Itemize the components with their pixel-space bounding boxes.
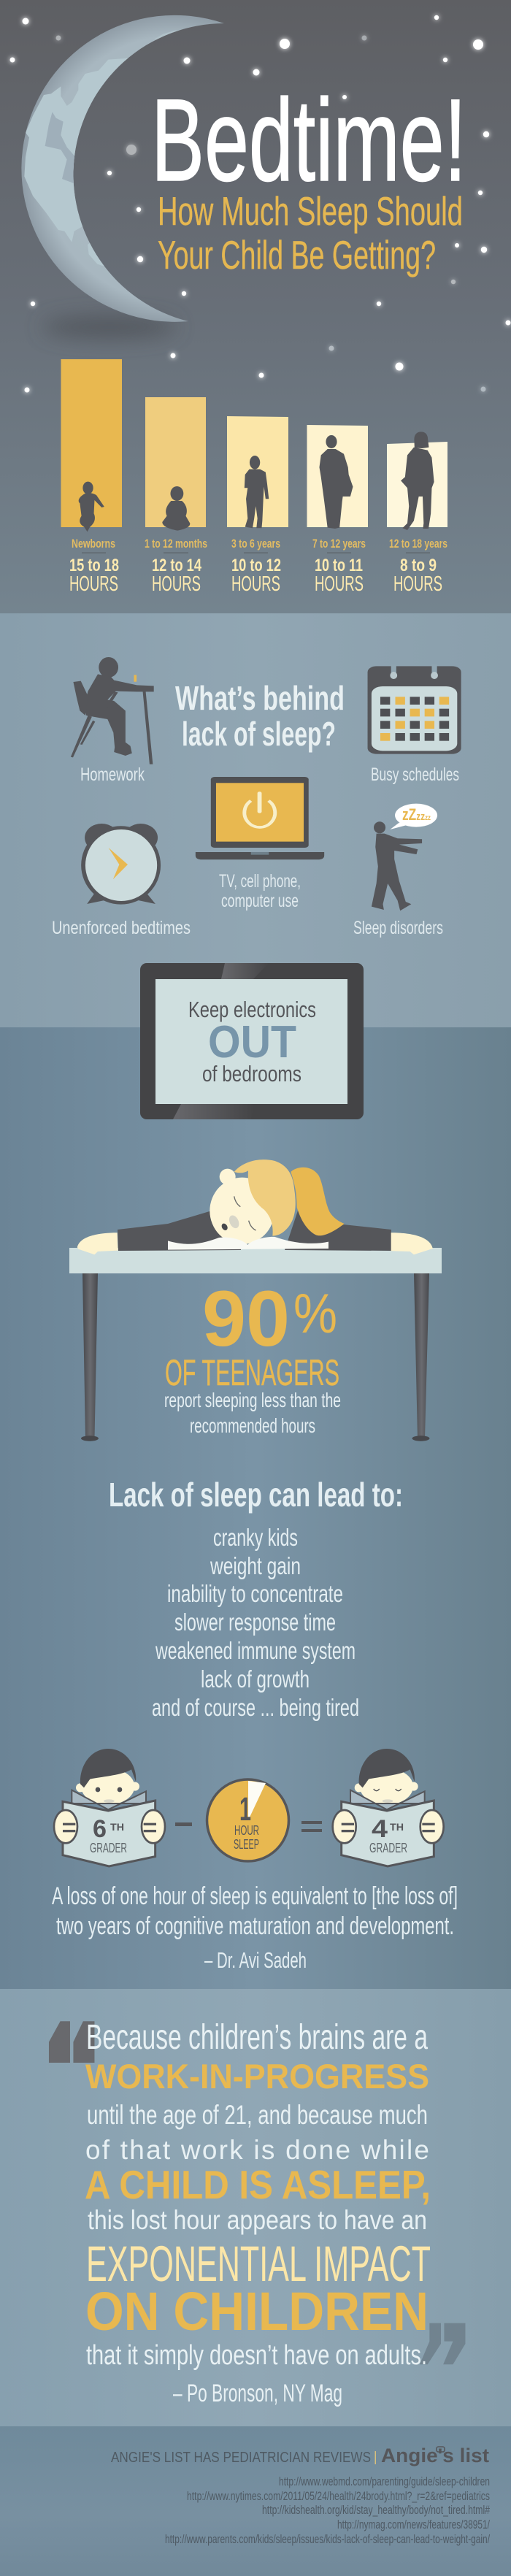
attribution: Dr. Avi Sadeh: – Dr. Avi Sadeh (204, 1947, 307, 1973)
bar: 12 to 18 years (387, 442, 447, 527)
list: effects of lack of sleep: lack of growth (201, 1665, 310, 1693)
moon shadow (42, 316, 177, 338)
icon: sleepwalker with speech bubble (372, 804, 437, 911)
hands (77, 1233, 433, 1254)
list: effects of lack of sleep: slower response time (174, 1609, 336, 1636)
text: report sleeping less: report sleeping less than the (164, 1389, 341, 1411)
footer: sponsor line: Angie's list (381, 2445, 489, 2466)
subtitle (158, 188, 463, 277)
quote: Po Bronson: this lost hour appears to have an (88, 2205, 427, 2235)
sleeping girl head (168, 1159, 345, 1250)
stars (10, 15, 511, 393)
heading: what's behind lack of sleep: lack of sleep? (182, 715, 336, 753)
callout: tablet keep electronics out of bedrooms (140, 963, 364, 1119)
panel: quote background (0, 1989, 511, 2426)
icon: alarm clock (81, 824, 161, 905)
label: tv, cell phone, computer use: computer use (221, 891, 299, 911)
list: effects of lack of sleep: inability to concentrate (167, 1580, 343, 1607)
label: tv, cell phone, computer use (219, 871, 301, 911)
age labels (72, 537, 447, 551)
hours labels: HOURS (315, 572, 364, 596)
icon: calendar (368, 664, 461, 754)
label: busy schedules: Busy schedules (371, 764, 459, 785)
heading: what's behind lack of sleep: What’s behind (175, 679, 345, 717)
panel: night sky background (0, 0, 511, 613)
quote: Po Bronson: WORK-IN-PROGRESS (85, 2057, 429, 2096)
icon: minus sign (175, 1822, 192, 1826)
panel: effects background (0, 1027, 511, 1989)
icon: 6th grader reading (54, 1749, 165, 1866)
table top (69, 1248, 442, 1273)
icon: 6th grader reading: GRADER (90, 1841, 127, 1855)
hours ranges: 10 to 12 (231, 556, 281, 575)
hours labels (69, 572, 442, 596)
hours labels: HOURS (69, 572, 118, 596)
sleeve left (118, 1211, 241, 1251)
icon: clock with one hour of sleep: 1 (239, 1790, 251, 1828)
age labels: 3 to 6 years (231, 537, 280, 551)
icon: clock with one hour of sleep (207, 1779, 289, 1861)
panel: causes background (0, 613, 511, 1027)
hours ranges (69, 556, 437, 575)
text: report sleeping less (164, 1389, 341, 1437)
label separators (82, 552, 430, 553)
hours labels: HOURS (152, 572, 201, 596)
icon: clock with one hour of sleep: SLEEP (234, 1837, 259, 1852)
text: loss of one hour quote (52, 1882, 458, 1940)
sleeve right (285, 1211, 391, 1251)
icon: 4th grader reading sleepy: TH (390, 1821, 404, 1833)
label: sleep disorders: Sleep disorders (353, 918, 443, 938)
bar: 3 to 6 years (227, 416, 288, 527)
attribution: Po Bronson: – Po Bronson, NY Mag (173, 2380, 342, 2407)
bar chart: sleep hours by age (61, 359, 447, 596)
quote: Po Bronson: of that work is done while (85, 2135, 429, 2165)
bar: 7 to 12 years (307, 425, 368, 527)
heading: lack of sleep can lead to: Lack of sleep can lead to: (109, 1476, 403, 1514)
hours ranges: 12 to 14 (152, 556, 201, 575)
stat: 90 percent (202, 1274, 337, 1362)
hours ranges: 10 to 11 (315, 556, 363, 575)
quote: Po Bronson (85, 2018, 431, 2371)
illustration: girl asleep on desk (69, 1159, 442, 1441)
callout: tablet keep electronics out of bedrooms: Keep electronics (188, 997, 316, 1022)
text: report sleeping less: recommended hours (190, 1414, 315, 1437)
icon: 6th grader reading: TH (110, 1821, 124, 1833)
footer: sponsor line (111, 2445, 489, 2466)
hours ranges: 15 to 18 (69, 556, 119, 575)
stat label: of teenagers: OF TEENAGERS (165, 1352, 339, 1393)
icon: 4th grader reading sleepy (333, 1749, 444, 1866)
heading: what's behind lack of sleep (175, 679, 345, 753)
label: homework: Homework (80, 764, 145, 785)
age labels: 7 to 12 years (312, 537, 366, 551)
age labels: 1 to 12 months (145, 537, 207, 551)
quote: Po Bronson: A CHILD IS ASLEEP, (85, 2162, 431, 2207)
stat: 90 percent: 90 (202, 1274, 290, 1362)
age labels: Newborns (72, 537, 115, 551)
panel: footer background (0, 2426, 511, 2576)
footer: sponsor line: ANGIE'S LIST HAS PEDIATRICIAN REVIEWS (111, 2450, 371, 2466)
silhouettes of children (79, 432, 434, 532)
callout: tablet keep electronics out of bedrooms: of bedrooms (202, 1061, 301, 1086)
icon: child doing homework (71, 657, 154, 764)
icon: 4th grader reading sleepy: 4 (372, 1815, 388, 1843)
icon: sleepwalker with speech bubble: zZzzzz (402, 805, 431, 824)
icon: closing quotation mark (420, 2323, 465, 2364)
list: effects of lack of sleep: weight gain (210, 1552, 301, 1579)
icon: clock with one hour of sleep: HOUR (234, 1823, 259, 1838)
label: unenforced bedtimes: Unenforced bedtimes (52, 918, 191, 938)
hours labels: HOURS (393, 572, 442, 596)
stat: 90 percent: % (293, 1283, 337, 1345)
icon: 6th grader reading: 6 (93, 1815, 107, 1843)
icon: equals sign (301, 1821, 322, 1832)
quote: Po Bronson: ON CHILDREN (85, 2281, 429, 2342)
moon (21, 15, 224, 322)
hours ranges: 8 to 9 (400, 556, 437, 575)
hours labels: HOURS (231, 572, 280, 596)
icon: opening quotation mark (49, 2021, 94, 2063)
bar: newborns (61, 359, 122, 527)
label: tv, cell phone, computer use: TV, cell phone, (219, 871, 301, 892)
callout: tablet keep electronics out of bedrooms: OUT (208, 1017, 296, 1067)
list: effects of lack of sleep: cranky kids (213, 1524, 298, 1551)
icon: laptop with power symbol (196, 777, 324, 859)
list: effects of lack of sleep: weakened immune system (155, 1637, 356, 1664)
bar: 1 to 12 months (145, 397, 206, 527)
footer: source links (165, 2475, 490, 2546)
table legs (81, 1273, 429, 1441)
icon: 4th grader reading sleepy: GRADER (369, 1841, 407, 1855)
age labels: 12 to 18 years (389, 537, 447, 551)
list: effects of lack of sleep (152, 1524, 359, 1721)
list: effects of lack of sleep: and of course ... being tired (152, 1694, 359, 1721)
